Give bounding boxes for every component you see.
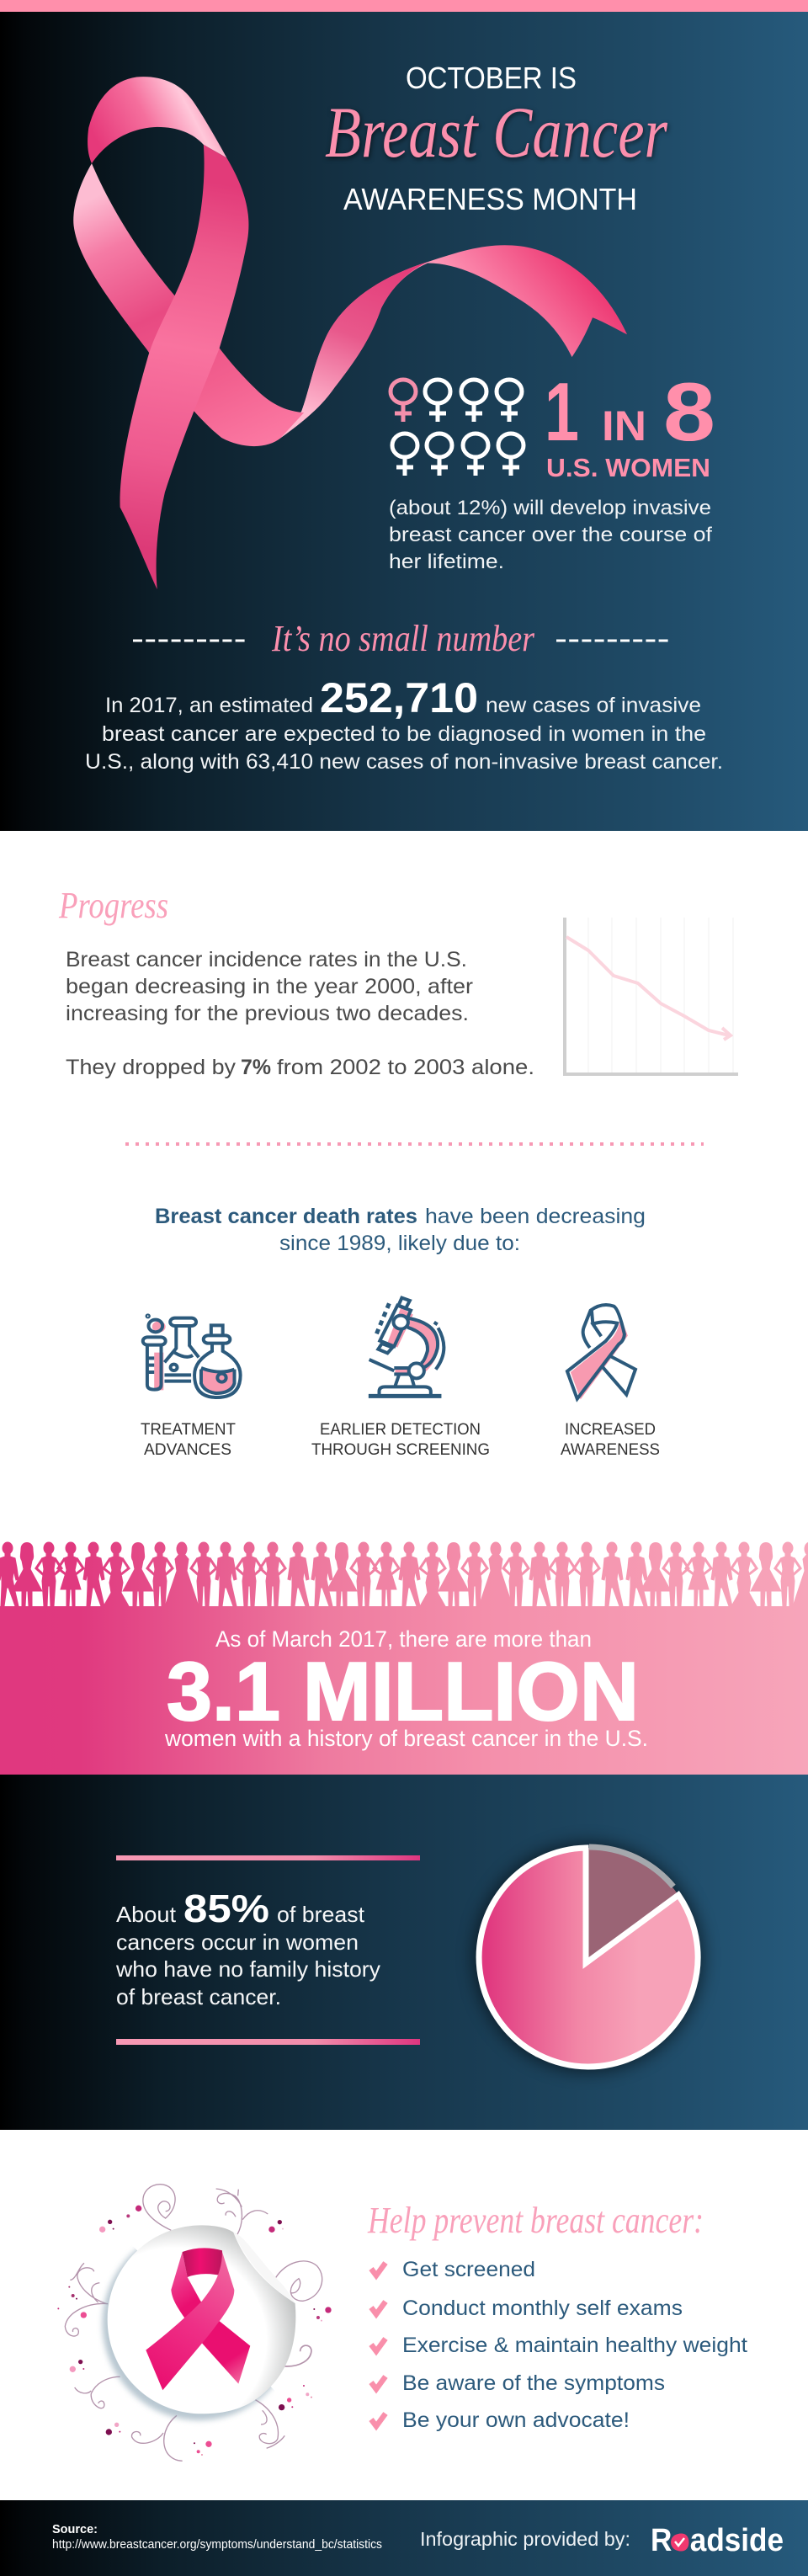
stat: 1 in 8: U.S. WOMEN — [546, 453, 710, 482]
title — [325, 61, 667, 216]
text: new cases statistics: In 2017, an estimated — [105, 694, 313, 717]
heading: Progress: Progress — [58, 885, 168, 926]
panel: 3.1 million band: 3.1 MILLION — [167, 1645, 639, 1738]
title: OCTOBER IS — [406, 61, 577, 95]
text: incidence rates: Breast cancer incidence rates in the U.S. — [66, 948, 467, 971]
panel: 3.1 million band: As of March 2017, there are more than — [215, 1626, 592, 1652]
text: 85 percent: who have no family history — [115, 1956, 380, 1982]
panel: hero dark section — [0, 12, 808, 831]
text: incidence rates: increasing for the previous two decades. — [66, 1002, 469, 1025]
icon: pink ribbon — [73, 77, 627, 589]
checklist — [371, 2258, 747, 2432]
icon: 8 female symbols — [391, 380, 524, 476]
text: 85 percent: of breast — [277, 1902, 365, 1927]
labels: reasons — [141, 1420, 660, 1459]
checklist: Be your own advocate! — [402, 2408, 630, 2432]
sticker shadow — [99, 2248, 274, 2424]
text: 85 percent: of breast cancer. — [116, 1984, 281, 2009]
pie chart: 85 percent — [474, 1843, 703, 2072]
text: incidence rates: 7% — [241, 1056, 271, 1079]
sticker ribbon — [171, 2252, 250, 2384]
labels: reasons: TREATMENT — [141, 1420, 236, 1439]
icon: sticker ribbon with swirls — [57, 2185, 332, 2461]
divider: dotted line — [125, 1142, 704, 1146]
heading: It's no small number: It’s no small number — [271, 618, 535, 659]
text: lifetime risk: (about 12%) will develop invasive — [389, 497, 711, 519]
stat: 1 in 8: IN — [602, 402, 646, 450]
text: 85 percent: 85% — [183, 1887, 269, 1930]
labels: reasons: EARLIER DETECTION — [320, 1420, 481, 1439]
panel: 3.1 million band: women with a history of breast cancer in the U.S. — [164, 1726, 648, 1751]
text: death rates intro — [155, 1205, 646, 1255]
text: 85 percent — [115, 1887, 380, 2009]
text: death rates intro: since 1989, likely due to: — [279, 1232, 520, 1255]
text: new cases statistics: breast cancer are expected to be diagnosed in women in the — [102, 722, 706, 746]
stat: 1 in 8 — [545, 365, 715, 482]
title: Breast Cancer — [325, 92, 667, 173]
footer: http://www.breastcancer.org/symptoms/understand_bc/statistics — [52, 2538, 382, 2552]
top pink bar — [0, 0, 808, 12]
labels: reasons: AWARENESS — [561, 1440, 660, 1459]
icon: treatment advances flasks — [143, 1315, 241, 1397]
footer — [0, 2500, 808, 2576]
labels: reasons: THROUGH SCREENING — [311, 1440, 490, 1459]
text: new cases statistics: new cases of invasive — [486, 694, 701, 717]
text: 85 percent: About — [116, 1902, 177, 1927]
line chart: declining incidence — [565, 918, 738, 1074]
text: lifetime risk: breast cancer over the course of — [389, 524, 712, 546]
stat: 1 in 8: 8 — [663, 365, 715, 458]
swirls — [65, 2185, 322, 2461]
text: incidence rates — [66, 948, 534, 1079]
text: incidence rates: from 2002 to 2003 alone. — [277, 1056, 534, 1079]
sticker disc — [108, 2225, 295, 2414]
title: AWARENESS MONTH — [343, 182, 637, 216]
labels: reasons: INCREASED — [565, 1420, 656, 1439]
text: 85 percent: cancers occur in women — [116, 1929, 359, 1955]
labels: reasons: ADVANCES — [144, 1440, 231, 1459]
icon: microscope — [369, 1298, 444, 1396]
decorative dots — [57, 2206, 332, 2456]
provided by: Infographic provided by: — [420, 2528, 630, 2550]
stat: 1 in 8: 1 — [545, 365, 579, 458]
text: death rates intro: Breast cancer death rates — [155, 1205, 417, 1228]
icon: awareness ribbon — [567, 1305, 635, 1399]
text: lifetime risk — [389, 497, 712, 573]
panel: family history dark section — [0, 1775, 808, 2130]
text: new cases statistics — [85, 674, 723, 774]
source: Source: — [52, 2522, 98, 2536]
text: lifetime risk: her lifetime. — [389, 551, 504, 573]
panel: 3.1 million band — [0, 1606, 808, 1775]
divider bars — [116, 1855, 420, 1860]
text: death rates intro: have been decreasing — [425, 1205, 646, 1228]
logo: Roadside: Roadside — [651, 2523, 784, 2558]
checklist: Exercise & maintain healthy weight — [402, 2334, 747, 2357]
text: incidence rates: began decreasing in the year 2000, after — [66, 975, 473, 998]
heading: Help prevent breast cancer: Help prevent breast cancer: — [367, 2200, 704, 2241]
text: incidence rates: They dropped by — [66, 1056, 237, 1079]
checklist: Conduct monthly self exams — [402, 2297, 683, 2320]
text: new cases statistics: 252,710 — [320, 674, 478, 721]
silhouettes: row of women — [0, 1542, 808, 1606]
panel: progress — [58, 885, 738, 1079]
checklist: Be aware of the symptoms — [402, 2371, 665, 2395]
checklist: Get screened — [402, 2258, 535, 2281]
text: new cases statistics: U.S., along with 63,410 new cases of non-invasive breast cancer. — [85, 750, 723, 774]
